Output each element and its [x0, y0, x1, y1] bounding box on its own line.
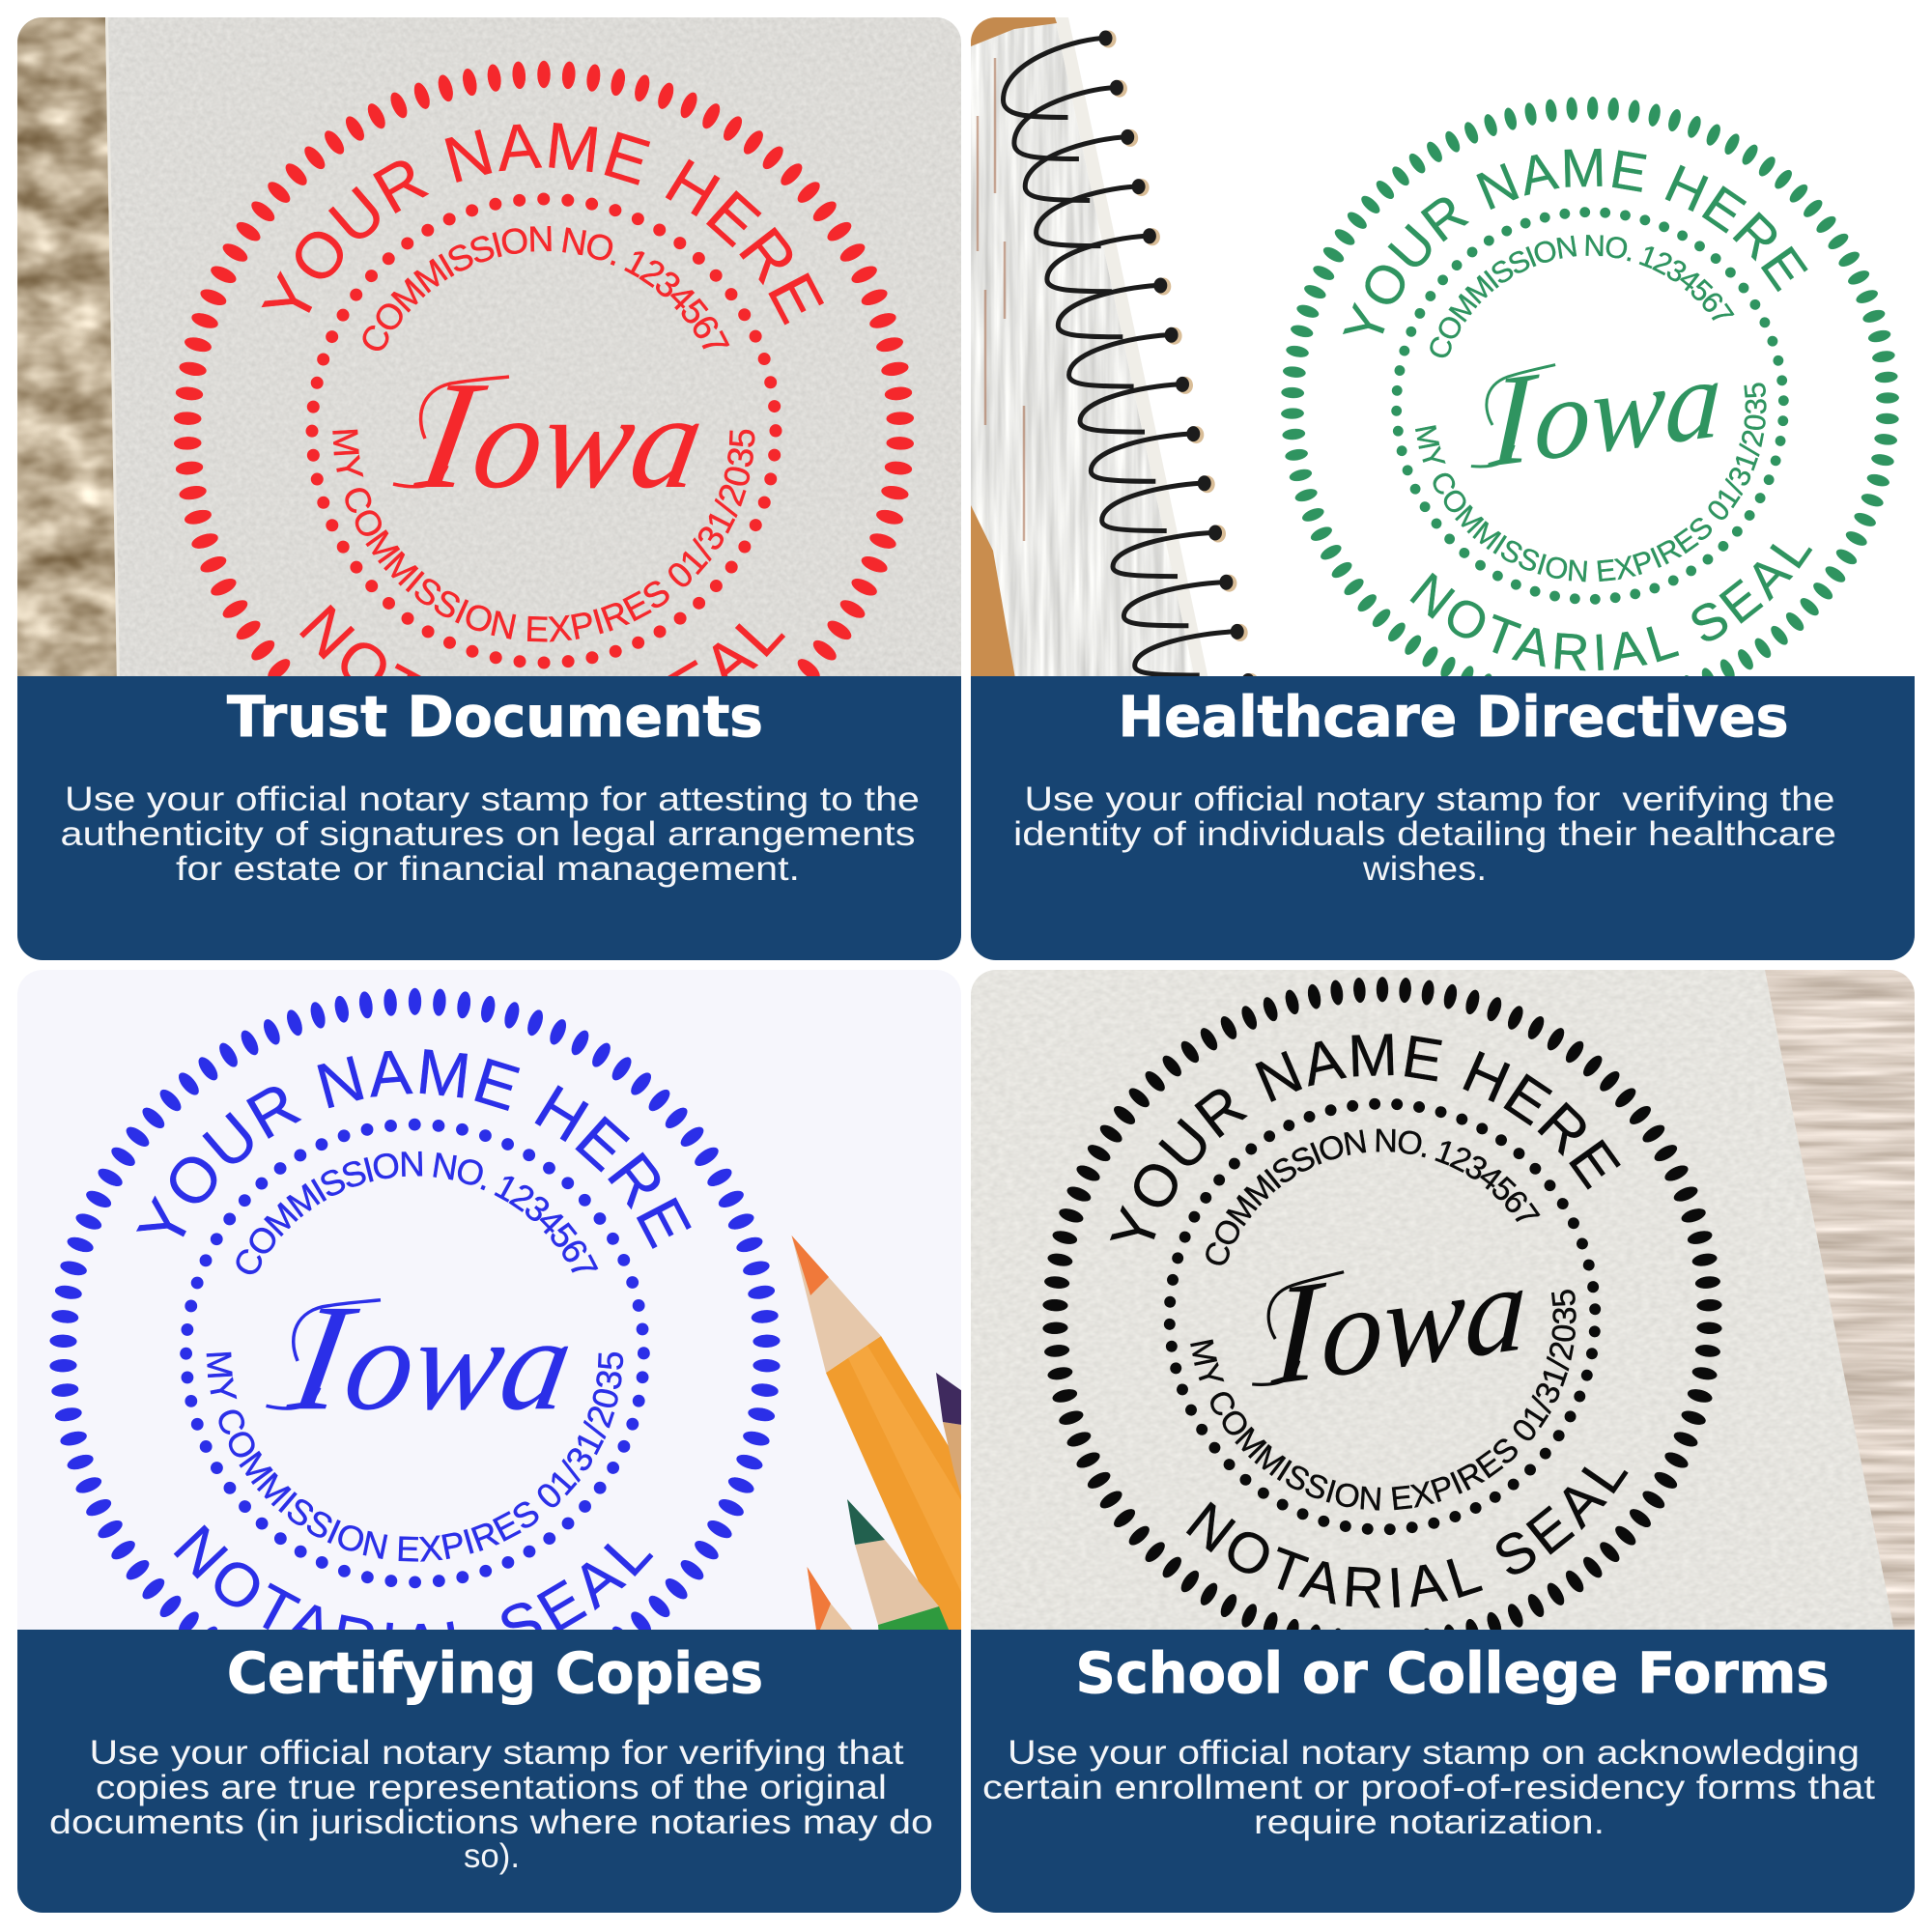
icon: purple pencil — [936, 1373, 962, 1499]
description text: for estate or financial management. — [176, 850, 800, 888]
description text — [1016, 786, 1835, 881]
description text — [49, 1734, 933, 1875]
description text: Use your official notary stamp for verifying the — [1024, 781, 1835, 818]
heading: Certifying Copies — [227, 1640, 763, 1706]
seal: black Iowa notary stamp: MY COMMISSION EXPIRES 01/31/2035 — [1190, 1290, 1577, 1511]
icon: orange pencil — [792, 1236, 962, 1636]
heading: Trust Documents — [227, 684, 763, 750]
seal: red Iowa notary stamp: MY COMMISSION EXPIRES 01/31/2035 — [332, 429, 755, 641]
description text: authenticity of signatures on legal arrangements — [60, 815, 916, 853]
spiral binding — [1003, 31, 1259, 724]
description text: so). — [464, 1837, 520, 1875]
seal: blue Iowa notary stamp: COMMISSION NO. 1234567 — [236, 1151, 599, 1275]
seal: green Iowa notary stamp: COMMISSION NO. 1234567 — [1430, 235, 1735, 357]
seal: black Iowa notary stamp: COMMISSION NO. 1234567 — [1206, 1128, 1540, 1265]
description text: wishes. — [1362, 850, 1487, 888]
description text: Use your official notary stamp for attesting to the — [65, 781, 920, 818]
description text: identity of individuals detailing their healthcare — [1013, 815, 1836, 853]
photo: textured paper on light wood — [971, 970, 1915, 1636]
photo: spiral notebook on whitewashed wood — [971, 17, 1915, 724]
panel: certifying copies — [17, 970, 961, 1913]
seal: blue Iowa notary stamp — [49, 987, 781, 1630]
caption band: healthcare directives — [971, 676, 1915, 960]
description text: require notarization. — [1254, 1804, 1605, 1841]
seal: black Iowa notary stamp: NOTARIAL SEAL — [1186, 1466, 1629, 1608]
description text: Use your official notary stamp on acknowledging — [1008, 1734, 1860, 1772]
seal: blue Iowa notary stamp: MY COMMISSION EXPIRES 01/31/2035 — [207, 1352, 624, 1562]
seal: red Iowa notary stamp: Iowa — [407, 349, 718, 521]
caption band: school or college forms — [971, 1630, 1915, 1913]
panel: healthcare directives — [971, 17, 1915, 960]
seal: red Iowa notary stamp: NOTARIAL SEAL — [299, 605, 785, 676]
description text: certain enrollment or proof-of-residency forms that — [982, 1769, 1875, 1806]
seal: black Iowa notary stamp — [1042, 977, 1722, 1630]
panel: school or college forms — [971, 970, 1915, 1913]
caption band: certifying copies — [17, 1630, 961, 1913]
panel: trust documents — [17, 17, 961, 960]
seal: black Iowa notary stamp: Iowa — [1269, 1221, 1530, 1416]
seal: red Iowa notary stamp — [174, 60, 914, 676]
photo: white paper with colored pencils — [17, 970, 962, 1636]
seal: blue Iowa notary stamp: Iowa — [279, 1273, 586, 1442]
seal: green Iowa notary stamp: Iowa — [1486, 320, 1725, 496]
seal: red Iowa notary stamp: YOUR NAME HERE — [261, 123, 824, 325]
seal: green Iowa notary stamp: NOTARIAL SEAL — [1410, 543, 1812, 670]
description text — [982, 1734, 1875, 1841]
description text — [60, 781, 920, 888]
description text: Use your official notary stamp for verifying that — [89, 1734, 904, 1772]
caption band: trust documents — [17, 676, 961, 960]
seal: blue Iowa notary stamp: NOTARIAL SEAL — [174, 1524, 653, 1630]
photo: paper on tan surface — [17, 17, 961, 684]
heading: Healthcare Directives — [1119, 684, 1789, 750]
description text: documents (in jurisdictions where notaries may do — [49, 1804, 933, 1841]
seal: blue Iowa notary stamp: YOUR NAME HERE — [136, 1049, 692, 1249]
description text: copies are true representations of the original — [96, 1769, 887, 1806]
icon: small orange pencil — [808, 1567, 852, 1630]
seal: black Iowa notary stamp: YOUR NAME HERE — [1109, 1034, 1621, 1240]
seal: green Iowa notary stamp — [1281, 97, 1899, 676]
heading: School or College Forms — [1076, 1640, 1830, 1706]
seal: green Iowa notary stamp: YOUR NAME HERE — [1343, 149, 1808, 334]
seal: green Iowa notary stamp: MY COMMISSION EXPIRES 01/31/2035 — [1415, 383, 1767, 582]
seal: red Iowa notary stamp: COMMISSION NO. 1234567 — [363, 226, 730, 351]
icon: green pencil — [847, 1499, 952, 1636]
